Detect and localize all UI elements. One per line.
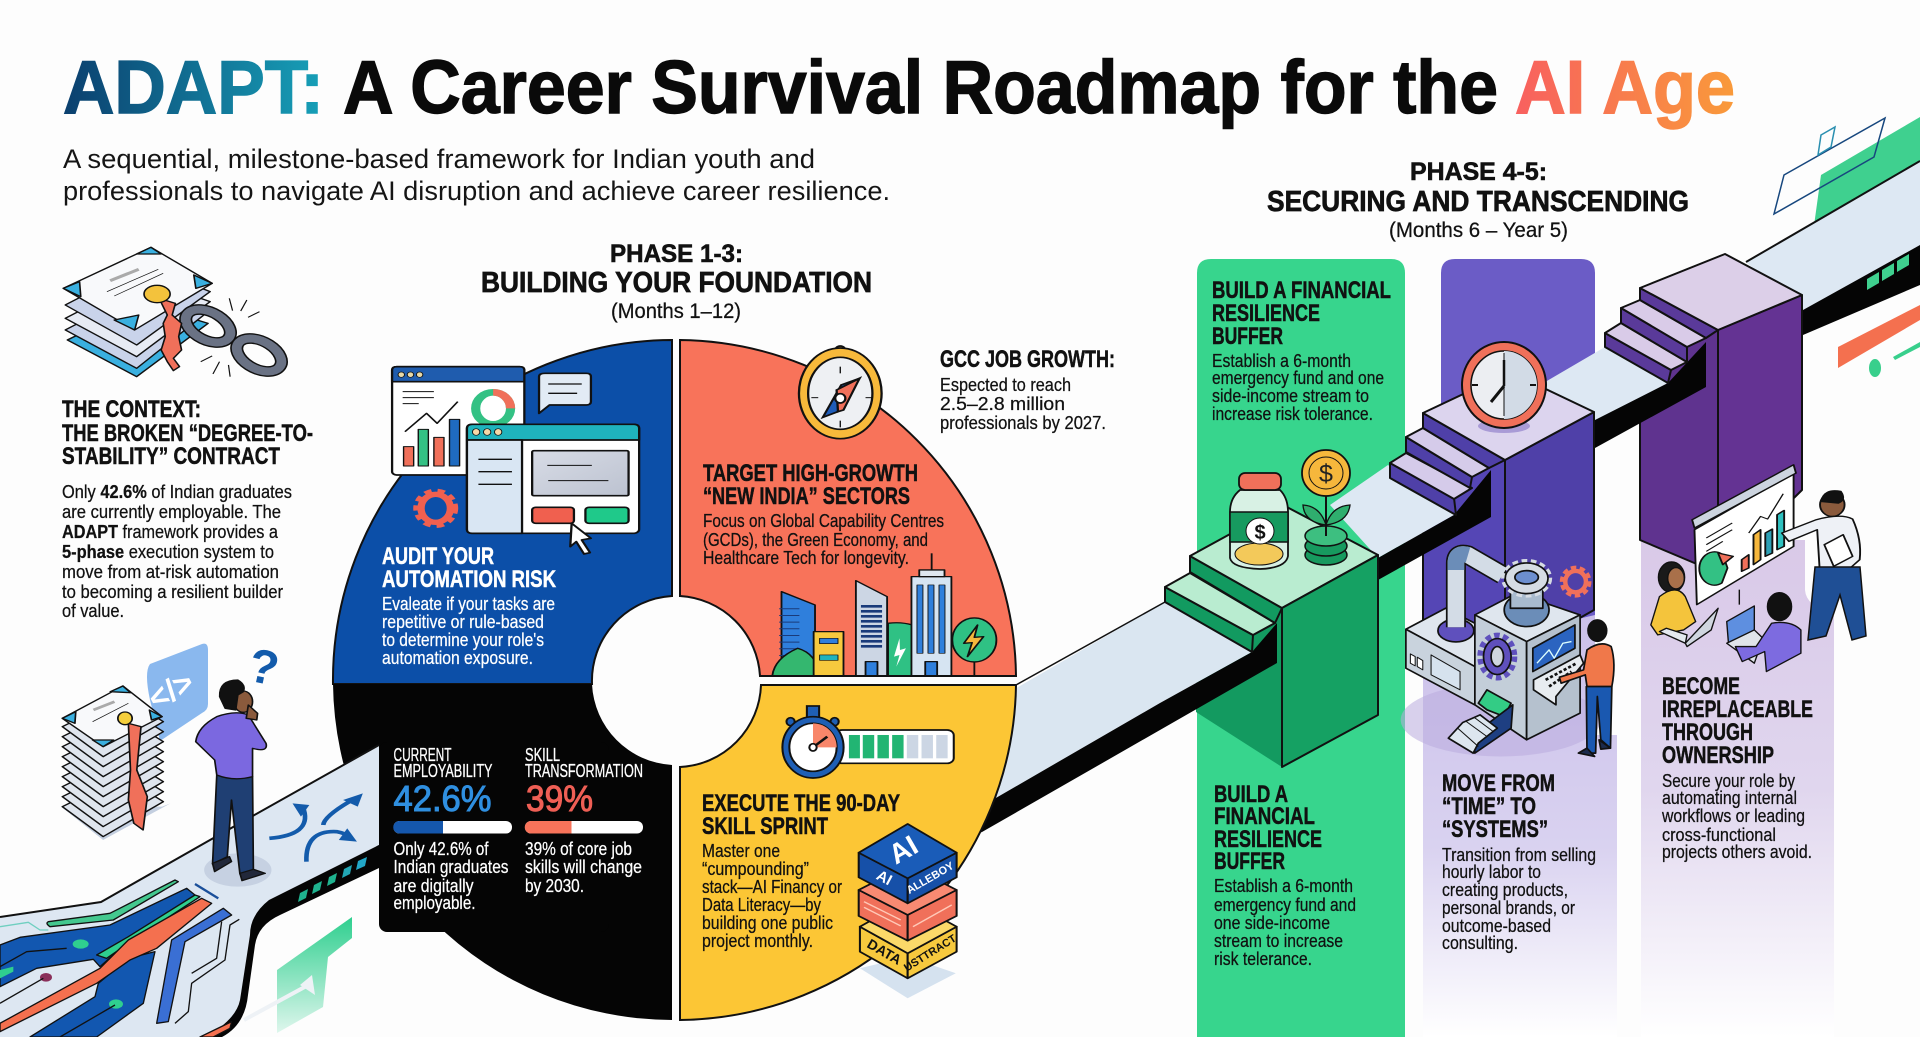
text: target high-growth sectors: “NEW INDIA” SECTORS bbox=[703, 483, 910, 510]
road: segment A bbox=[960, 560, 1282, 840]
pie: yellow quadrant bbox=[680, 685, 1016, 1020]
stat: skill transformation: TRANSFORMATION bbox=[525, 761, 643, 781]
text: execute the 90-day skill sprint: EXECUTE THE 90-DAY bbox=[702, 790, 900, 817]
text: green column bottom: emergency fund and bbox=[1214, 895, 1356, 915]
icon: coin plant bbox=[1302, 450, 1350, 565]
text: become irreplaceable through ownership: IRREPLACEABLE bbox=[1662, 696, 1813, 723]
text: move from time to systems: hourly labor to bbox=[1442, 862, 1541, 882]
heading: phase 4-5: (Months 6 – Year 5) bbox=[1389, 219, 1568, 242]
icon: seated colleagues bbox=[1651, 562, 1801, 672]
text: audit your automation risk: Evaleate if your tasks are bbox=[382, 594, 555, 614]
icon: road direction arrows bbox=[269, 793, 363, 862]
stat: skill transformation: skills will change bbox=[525, 857, 642, 877]
text: audit your automation risk: AUTOMATION RISK bbox=[382, 566, 557, 593]
accent marks right bbox=[1838, 305, 1920, 377]
stat: current employability: employable. bbox=[394, 893, 476, 913]
text: the context: of value. bbox=[62, 601, 124, 621]
heading: phase 4-5 bbox=[1267, 158, 1689, 242]
text: audit your automation risk: to determine your role's bbox=[382, 630, 544, 650]
stat: current employability bbox=[393, 745, 512, 913]
text: the context: ADAPT framework provides a bbox=[62, 522, 279, 542]
text: execute the 90-day skill sprint: Data Literacy—by bbox=[702, 895, 821, 915]
callout: gcc job growth bbox=[940, 346, 1115, 433]
pie: coral quadrant bbox=[680, 340, 1016, 676]
text: green column top: emergency fund and one bbox=[1212, 368, 1384, 388]
subtitle: A sequential, milestone-based framework for Indian youth and bbox=[63, 144, 815, 174]
stat: current employability: CURRENT bbox=[394, 745, 452, 765]
text: become irreplaceable through ownership: THROUGH bbox=[1662, 719, 1753, 746]
road: right segment D bbox=[1746, 161, 1920, 335]
text: the context: are currently employable. The bbox=[62, 502, 281, 522]
callout: gcc job growth: Espected to reach bbox=[940, 375, 1071, 395]
text: the context: 5-phase execution system to bbox=[62, 542, 274, 562]
stat: current employability: EMPLOYABILITY bbox=[394, 761, 492, 781]
icon: presentation board and presenter bbox=[1692, 465, 1860, 605]
text: move from time to systems: consulting. bbox=[1442, 933, 1518, 953]
pie: black quadrant bbox=[333, 684, 672, 1020]
text: become irreplaceable through ownership: automating internal bbox=[1662, 788, 1797, 808]
panel: green column bbox=[1197, 259, 1405, 1037]
icon: thinking person bbox=[196, 680, 271, 887]
stat: current employability: Only 42.6% of bbox=[394, 839, 489, 859]
heading: phase 1-3: BUILDING YOUR FOUNDATION bbox=[481, 267, 872, 299]
icon: compass bbox=[799, 346, 882, 439]
pillar: purple bbox=[1330, 372, 1594, 660]
subtitle: professionals to navigate AI disruption and achieve career resilience. bbox=[63, 176, 890, 206]
text: the context: THE CONTEXT: bbox=[62, 396, 201, 423]
text: execute the 90-day skill sprint: building one public bbox=[702, 913, 833, 933]
icon: stopwatch with progress bar bbox=[782, 706, 954, 778]
pillar: dark purple bbox=[1540, 254, 1802, 573]
panel: purple column upper bbox=[1441, 259, 1595, 640]
stat: skill transformation: by 2030. bbox=[525, 876, 584, 896]
road: left segment bbox=[0, 745, 379, 1037]
text: green column bottom bbox=[1214, 781, 1356, 969]
heading: phase 4-5: PHASE 4-5: bbox=[1410, 158, 1547, 186]
icon: stacked skill cubes: AI bbox=[883, 829, 923, 870]
stat: skill transformation: SKILL bbox=[525, 745, 560, 765]
text: green column bottom: BUFFER bbox=[1214, 848, 1285, 875]
text: target high-growth sectors: TARGET HIGH-GROWTH bbox=[703, 460, 918, 487]
text: execute the 90-day skill sprint: “cumpounding” bbox=[702, 859, 809, 879]
icon: degree stack with thinking person's code bubble: </> bbox=[142, 664, 200, 717]
text: green column top: Establish a 6-month bbox=[1212, 351, 1351, 371]
text: become irreplaceable through ownership: OWNERSHIP bbox=[1662, 742, 1774, 769]
stat: skill transformation bbox=[525, 745, 643, 896]
text: audit your automation risk bbox=[382, 543, 557, 668]
title: AI Age bbox=[1515, 45, 1735, 129]
text: become irreplaceable through ownership: BECOME bbox=[1662, 673, 1740, 700]
heading: phase 1-3 bbox=[481, 240, 872, 323]
icon: wall clock bbox=[1462, 342, 1546, 433]
icon: stacked skill cubes: DATA bbox=[865, 936, 904, 968]
callout: gcc job growth: professionals by 2027. bbox=[940, 413, 1106, 433]
text: audit your automation risk: automation exposure. bbox=[382, 648, 533, 668]
text: move from time to systems: “TIME” TO bbox=[1442, 793, 1536, 820]
title: A Career Survival Roadmap for the bbox=[343, 45, 1498, 129]
text: the context: move from at-risk automation bbox=[62, 562, 279, 582]
text: become irreplaceable through ownership bbox=[1661, 673, 1813, 862]
icon: green upward arrow card bbox=[244, 917, 352, 1037]
text: become irreplaceable through ownership: Secure your role by bbox=[1662, 771, 1795, 791]
panel: stats card bbox=[379, 742, 609, 932]
icon: savings jar: $ bbox=[1254, 522, 1266, 544]
icon: stacked skill cubes: USTTRACT bbox=[902, 933, 959, 974]
text: audit your automation risk: AUDIT YOUR bbox=[382, 543, 494, 570]
text: the context: STABILITY” CONTRACT bbox=[62, 443, 280, 470]
icon: factory machine and worker bbox=[1401, 554, 1614, 756]
icon: stacked skill cubes: AI bbox=[874, 867, 895, 889]
text: move from time to systems: personal brands, or bbox=[1442, 898, 1575, 918]
text: execute the 90-day skill sprint: stack—AI Financy or bbox=[702, 877, 842, 897]
text: target high-growth sectors bbox=[703, 460, 944, 568]
heading: phase 1-3: PHASE 1-3: bbox=[610, 240, 743, 268]
heading: phase 4-5: SECURING AND TRANSCENDING bbox=[1267, 186, 1689, 218]
text: green column bottom: Establish a 6-month bbox=[1214, 876, 1353, 896]
text: green column top: RESILIENCE bbox=[1212, 300, 1320, 327]
text: green column bottom: BUILD A bbox=[1214, 781, 1288, 808]
text: green column bottom: RESILIENCE bbox=[1214, 826, 1322, 853]
text: execute the 90-day skill sprint bbox=[702, 790, 900, 951]
text: execute the 90-day skill sprint: project monthly. bbox=[702, 931, 813, 951]
icon: tall stack of certificates bbox=[61, 686, 170, 840]
text: green column bottom: one side-income bbox=[1214, 913, 1330, 933]
callout: gcc job growth: GCC JOB GROWTH: bbox=[940, 346, 1115, 373]
text: green column bottom: stream to increase bbox=[1214, 931, 1343, 951]
text: target high-growth sectors: Focus on Global Capability Centres bbox=[703, 511, 944, 531]
heading: phase 1-3: (Months 1–12) bbox=[611, 300, 741, 323]
text: target high-growth sectors: Healthcare Tech for longevity. bbox=[703, 548, 909, 568]
presenter legs bbox=[1808, 567, 1866, 640]
text: become irreplaceable through ownership: workflows or leading bbox=[1661, 806, 1805, 826]
icon: coin plant: $ bbox=[1319, 460, 1333, 488]
stat: current employability: 42.6% bbox=[394, 778, 492, 819]
stat: skill transformation: 39% of core job bbox=[525, 839, 632, 859]
callout: gcc job growth: 2.5–2.8 million bbox=[940, 394, 1065, 414]
road circuits bbox=[0, 880, 239, 1037]
text: green column top: BUFFER bbox=[1212, 323, 1283, 350]
icon: degree certificates with broken chain bbox=[63, 247, 289, 378]
text: green column top: BUILD A FINANCIAL bbox=[1212, 277, 1391, 304]
text: the context: Only 42.6% of Indian graduates bbox=[62, 482, 292, 502]
icon: question mark: ? bbox=[244, 639, 283, 697]
text: the context: to becoming a resilient builder bbox=[62, 582, 283, 602]
text: move from time to systems bbox=[1442, 770, 1596, 953]
icon: city skyline bbox=[772, 553, 996, 676]
icon: savings jar bbox=[1230, 473, 1288, 569]
text: target high-growth sectors: (GCDs), the Green Economy, and bbox=[703, 530, 928, 550]
icon: degree stack with thinking person's code bubble bbox=[142, 644, 208, 741]
stat: current employability: are digitally bbox=[394, 876, 474, 896]
text: green column top bbox=[1212, 277, 1391, 424]
text: the context: THE BROKEN “DEGREE-TO- bbox=[62, 420, 313, 447]
decoration: top right green shape and wireframes bbox=[1774, 117, 1920, 240]
icon: stacked skill cubes: ALLEBOY bbox=[905, 860, 957, 897]
title: ADAPT: bbox=[63, 45, 324, 129]
pie: blue quadrant bbox=[333, 340, 672, 684]
text: green column top: side-income stream to bbox=[1212, 386, 1369, 406]
panel: purple column lower bbox=[1423, 615, 1617, 1037]
icon: stacked skill cubes bbox=[859, 824, 959, 998]
text: move from time to systems: Transition from selling bbox=[1442, 845, 1596, 865]
text: green column bottom: risk telerance. bbox=[1214, 949, 1312, 969]
text: become irreplaceable through ownership: cross-functional bbox=[1662, 825, 1776, 845]
text: execute the 90-day skill sprint: SKILL SPRINT bbox=[702, 813, 828, 840]
text: move from time to systems: creating products, bbox=[1442, 880, 1568, 900]
text: green column top: increase risk tolerance. bbox=[1212, 404, 1373, 424]
text: move from time to systems: MOVE FROM bbox=[1442, 770, 1555, 797]
pillar: green bbox=[1165, 505, 1378, 767]
panel: dark purple column lower bbox=[1641, 540, 1834, 1037]
stat: skill transformation: 39% bbox=[526, 778, 593, 819]
text: move from time to systems: outcome-based bbox=[1442, 916, 1551, 936]
text: execute the 90-day skill sprint: Master one bbox=[702, 841, 780, 861]
subtitle bbox=[63, 144, 890, 206]
text: move from time to systems: “SYSTEMS” bbox=[1442, 816, 1548, 843]
text: audit your automation risk: repetitive or rule-based bbox=[382, 612, 544, 632]
text: the context bbox=[62, 396, 313, 621]
text: green column bottom: FINANCIAL bbox=[1214, 803, 1315, 830]
text: become irreplaceable through ownership: projects others avoid. bbox=[1662, 842, 1812, 862]
stat: current employability: Indian graduates bbox=[394, 857, 508, 877]
icon: audit windows bbox=[392, 367, 639, 554]
